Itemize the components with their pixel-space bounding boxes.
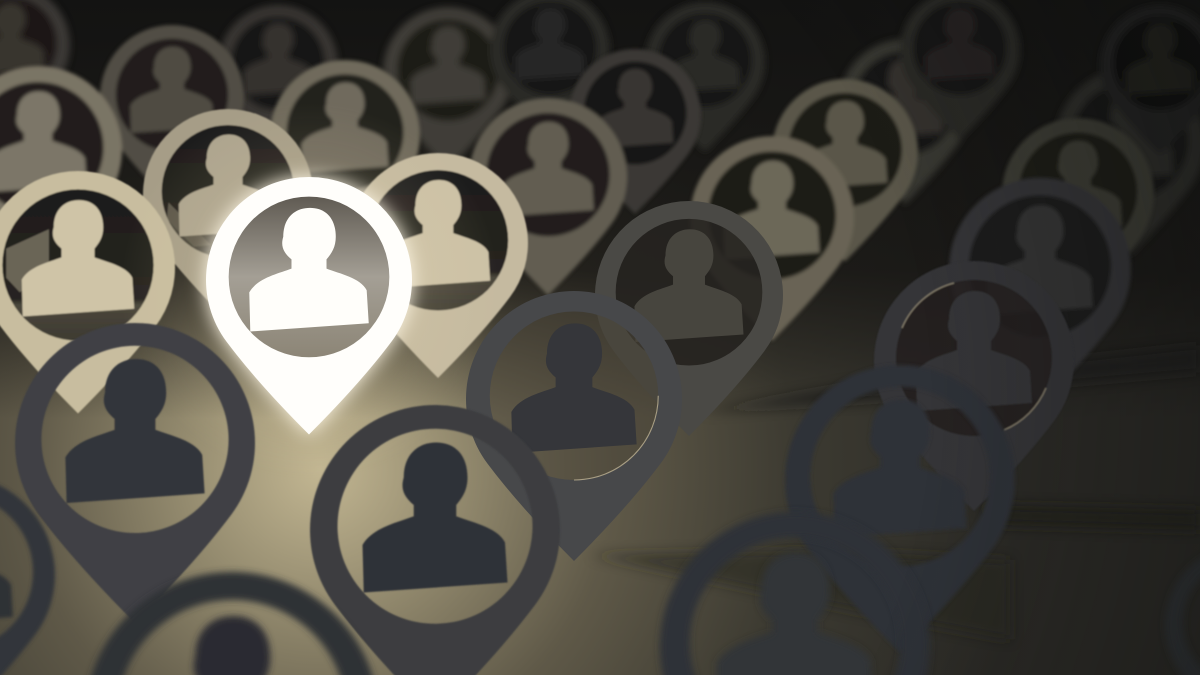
middle back row of pins	[0, 25, 1154, 406]
far back row of pins	[0, 0, 1200, 255]
dark pins right of centre	[466, 201, 1074, 561]
foreground left pins	[15, 323, 560, 675]
floor step shadows	[590, 345, 1200, 640]
blurred foreground pins	[0, 365, 1015, 675]
icon: highlighted glowing pin	[206, 177, 412, 434]
nearest out-of-focus pins	[85, 512, 1200, 675]
lit neighbouring pins	[0, 109, 528, 414]
glow halo behind highlighted pin	[120, 100, 500, 480]
